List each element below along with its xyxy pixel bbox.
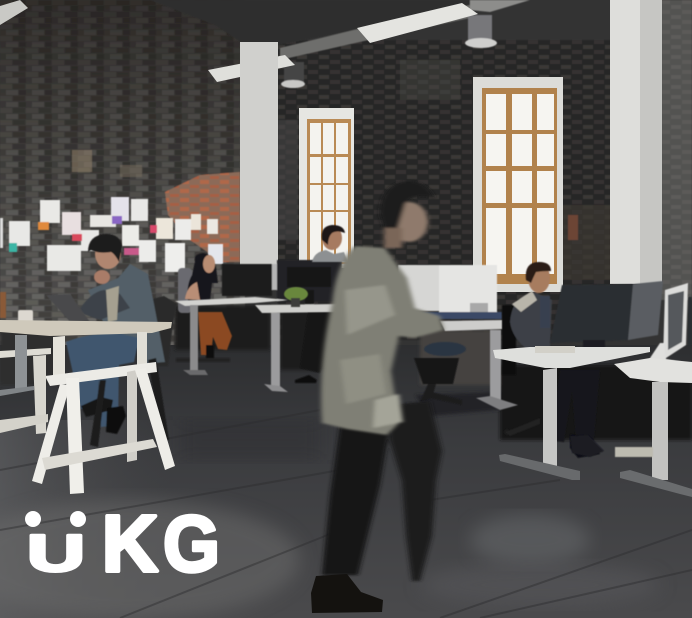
- walking man shoe: [311, 574, 383, 613]
- logo letter G: G: [163, 499, 220, 588]
- logo letter U: U: [27, 525, 85, 583]
- laptop and mug: [0, 292, 100, 332]
- center ceiling light: [357, 3, 478, 43]
- UKG logo: [25, 499, 220, 588]
- left brick wall: [0, 0, 245, 350]
- man in blazer: [66, 234, 177, 447]
- walking man head: [380, 181, 435, 248]
- right desks: [493, 346, 692, 497]
- corner ceiling light: [0, 0, 28, 25]
- seated man at monitor: [502, 262, 600, 458]
- right pillar: [610, 0, 662, 284]
- white partition screens: [398, 265, 502, 319]
- left ceiling light: [208, 55, 295, 82]
- walking man, motion blurred: [311, 181, 444, 613]
- floor: [0, 345, 692, 618]
- woman at window: [295, 225, 348, 383]
- wall notes and sketches: [0, 197, 223, 272]
- back desks and monitors: [175, 260, 342, 392]
- power strip and seated man's shoes: [504, 418, 653, 457]
- walking man legs: [322, 401, 442, 581]
- left pillar: [240, 42, 278, 267]
- window one: [299, 108, 354, 268]
- mesh office chair: [414, 342, 466, 405]
- logo letter K: K: [102, 499, 158, 588]
- left trestle desk: [0, 320, 175, 494]
- window two: [473, 77, 563, 292]
- right brick wall: [278, 0, 692, 340]
- ceiling and ducts: [150, 0, 530, 88]
- potted plant: [284, 287, 308, 307]
- walking man jacket: [321, 246, 444, 435]
- desktop monitors: [550, 281, 692, 367]
- back wall lower band and dark furniture: [0, 305, 692, 440]
- woman at back desk: [176, 253, 232, 362]
- far left trestle desk: [0, 335, 51, 434]
- logo dots above the U: [25, 511, 86, 527]
- middle desk: [440, 320, 518, 410]
